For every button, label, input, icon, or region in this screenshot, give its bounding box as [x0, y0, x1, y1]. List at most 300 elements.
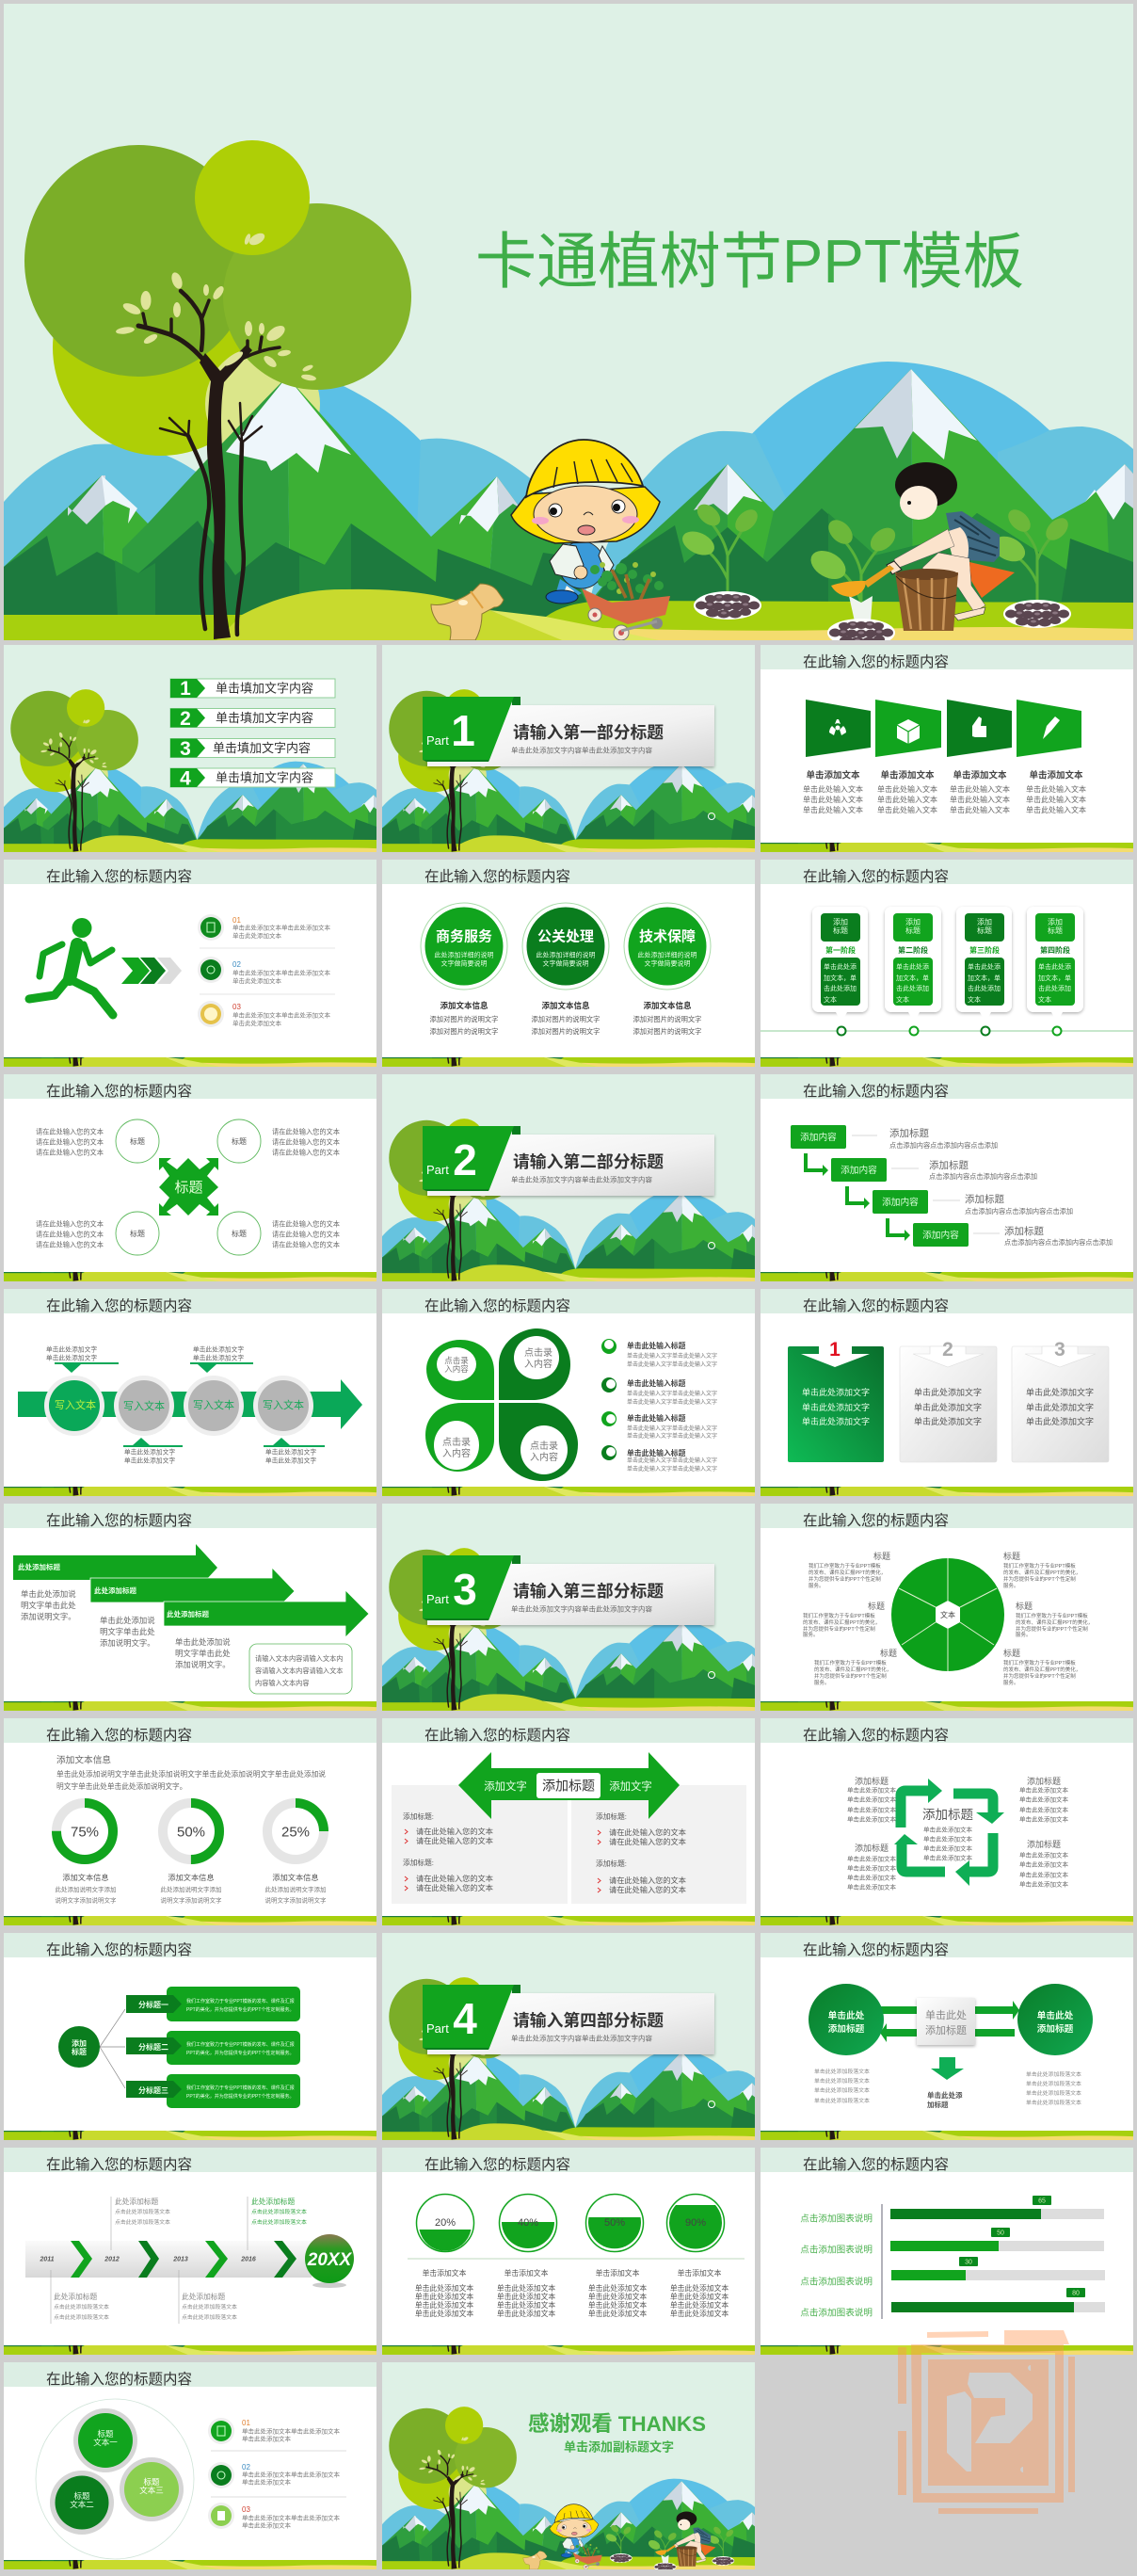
column 1 text: 单击添加文本	[806, 770, 860, 781]
side text: 请在此处输入您的文本	[272, 1241, 340, 1248]
step text: 添加标题	[1004, 1225, 1044, 1237]
outline circle	[36, 2399, 194, 2559]
years: 2012	[104, 2256, 120, 2263]
heading: 在此输入您的标题内容	[424, 2156, 570, 2173]
top right list	[1019, 1776, 1069, 1823]
years	[39, 2256, 256, 2263]
side text: 请在此处输入您的文本	[36, 1241, 104, 1248]
note box	[249, 1644, 352, 1694]
contents item 1	[170, 678, 335, 700]
top left list	[847, 1776, 896, 1823]
branch 1	[126, 1987, 300, 2021]
node labels: 写入文本	[263, 1398, 304, 1411]
step box labels: 添加内容	[800, 1131, 837, 1143]
step text: 点击添加内容点击添加内容点击添加	[1004, 1238, 1113, 1247]
stage card 3: 第三阶段	[969, 945, 1000, 955]
gauge text 4	[670, 2268, 729, 2318]
arrow: down	[931, 2057, 964, 2080]
four-leaf shape: 入内容	[524, 1358, 552, 1370]
gauge text 1	[415, 2268, 473, 2318]
left panel text: 请在此处输入您的文本	[416, 1883, 493, 1892]
side text: 请在此处输入您的文本	[36, 1230, 104, 1239]
double arrow: 添加标题	[542, 1778, 595, 1793]
donut captions	[55, 1873, 327, 1904]
bottom left block: 服务。	[814, 1679, 830, 1686]
top right block: 的发布、课件及汇报PPT的美化，	[1003, 1569, 1081, 1576]
card 2	[900, 1339, 997, 1462]
service captions: 添加对图片的说明文字	[532, 1027, 600, 1036]
scene: tree, mountains and children	[4, 4, 1133, 647]
heading: 在此输入您的标题内容	[424, 1297, 570, 1314]
column 2 text: 单击此处输入文本	[877, 795, 937, 804]
side text	[36, 1128, 340, 1248]
side text: 请在此处输入您的文本	[272, 1220, 340, 1228]
stage card 2: 文本	[896, 995, 909, 1004]
stage card 3: 文本	[968, 995, 981, 1004]
list text: 单击此处输入标题	[627, 1448, 686, 1457]
branch 2	[126, 2031, 300, 2065]
arrow 1	[13, 1544, 217, 1580]
service captions: 添加对图片的说明文字	[532, 1015, 600, 1023]
four-leaf shape: 入内容	[444, 1364, 469, 1374]
arrow 3: 此处添加标题	[167, 1609, 209, 1618]
contents item 2: 单击填加文字内容	[216, 711, 313, 725]
item 01: 单击此处添加文本	[232, 931, 282, 940]
panel: running man slide	[4, 860, 376, 1067]
bar labels	[800, 2213, 873, 2318]
circle labels: 标题	[130, 1229, 145, 1238]
bottom left list	[847, 1843, 896, 1891]
side text: 请在此处输入您的文本	[272, 1149, 340, 1156]
panel: cascading arrows slide	[4, 1504, 376, 1711]
list text: 单击此处输入文字单击此处输入文字	[627, 1390, 717, 1397]
bottom left list: 单击此处添加文本	[847, 1883, 896, 1891]
double arrow: 添加文字	[484, 1779, 527, 1793]
card 2: 单击此处添加文字	[914, 1402, 982, 1412]
note box: 容请输入文本内容请输入文本	[255, 1666, 343, 1675]
four-leaf shape: 入内容	[530, 1451, 558, 1463]
column 3 text: 单击此处输入文本	[950, 795, 1010, 804]
item 02: 02	[242, 2463, 250, 2471]
cover slide	[4, 4, 1133, 647]
intro text: 单击此处添加说明文字单击此处添加说明文字单击此处添加说明文字单击此处添加说	[56, 1769, 326, 1779]
card 1: 1	[829, 1339, 841, 1360]
bottom right list: 单击此处添加文本	[1019, 1870, 1069, 1879]
four-leaf shape	[425, 1328, 578, 1481]
right panel text: 添加标题:	[596, 1811, 627, 1821]
list text: 单击此处输入文字单击此处输入文字	[627, 1352, 717, 1360]
intro text: 添加文本信息	[56, 1753, 111, 1766]
four-leaf shape: 点击录	[442, 1437, 471, 1448]
timeline band	[25, 2241, 312, 2278]
card 2: 单击此处添加文字	[914, 1416, 982, 1426]
bottom right block: 标题	[1003, 1648, 1020, 1658]
panel: four-leaf slide	[382, 1289, 755, 1496]
milestone above 1: 点击此处添加段落文本	[115, 2208, 170, 2215]
stage card 2: 标题	[905, 926, 921, 935]
donut captions: 此处添加说明文字添加	[160, 1885, 222, 1893]
stage card 1: 单击此处添	[824, 962, 857, 971]
watermark stamp	[898, 2330, 1075, 2514]
centre box: 单击此处	[925, 2009, 967, 2021]
step text: 添加标题	[889, 1127, 929, 1139]
circle labels	[130, 1136, 247, 1238]
cycle centre text	[922, 1808, 973, 1862]
step text: 添加标题	[929, 1159, 969, 1171]
pennant shapes with icons	[806, 700, 1081, 757]
bubble 1: 标题	[97, 2429, 114, 2439]
panel: four stages slide	[761, 860, 1133, 1067]
gauge 40 percent	[499, 2194, 557, 2252]
stage card 3	[956, 907, 1012, 1036]
card 1: 单击此处添加文字	[802, 1387, 870, 1397]
bar labels: 点击添加图表说明	[800, 2213, 873, 2224]
stage card 1: 文本	[824, 995, 837, 1004]
heading: 在此输入您的标题内容	[803, 653, 949, 670]
stage card 4	[1027, 907, 1083, 1036]
heading: 在此输入您的标题内容	[424, 868, 570, 885]
left text: 单击此处添加段落文本	[814, 2097, 870, 2104]
top left list: 单击此处添加文本	[847, 1806, 896, 1813]
top left block: 的发布、课件及汇报PPT的美化，	[809, 1569, 886, 1576]
stage card 2: 击此处添加	[896, 984, 929, 992]
panel: four pennant icons slide	[761, 645, 1133, 852]
stage card 3: 单击此处添	[968, 962, 1001, 971]
left panel text: 请在此处输入您的文本	[416, 1827, 493, 1836]
bottom right block: 并为您提供专业的PPT个性定制	[1003, 1672, 1076, 1680]
arrow text 1: 单击此处添加说	[21, 1589, 76, 1599]
donut 75 percent	[56, 1803, 113, 1860]
panel: part 3 section slide	[382, 1504, 755, 1711]
part 4 labels: Part	[426, 2021, 449, 2036]
middle right block: 的发布、课件及汇报PPT的美化，	[1016, 1618, 1093, 1626]
item 02	[198, 957, 331, 985]
right text: 单击此处添加段落文本	[1026, 2070, 1081, 2078]
item 02: 单击此处添加文本	[242, 2478, 292, 2486]
gauge 20 percent: 20%	[435, 2217, 456, 2229]
item 03: 03	[242, 2505, 250, 2514]
branch 2: 我们工作室致力于专业PPT模板的发布、课件及汇报	[186, 2041, 295, 2048]
column 2 text: 单击添加文本	[880, 770, 935, 781]
bar labels: 点击添加图表说明	[800, 2245, 873, 2256]
service circle 3: 此处添加详细的说明	[638, 951, 697, 958]
service circle 1: 此处添加详细的说明	[435, 951, 493, 958]
list bullets	[601, 1339, 617, 1460]
circle labels: 标题	[130, 1136, 145, 1146]
right panel text: 请在此处输入您的文本	[609, 1837, 686, 1846]
list text: 单击此处输入标题	[627, 1413, 686, 1423]
gauge text 3: 单击添加文本	[596, 2268, 640, 2278]
bottom left list: 添加标题	[855, 1843, 889, 1853]
list text: 单击此处输入文字单击此处输入文字	[627, 1425, 717, 1432]
milestone above 1	[115, 2197, 170, 2226]
part 4 labels	[426, 1994, 477, 2043]
right text: 单击此处添加段落文本	[1026, 2099, 1081, 2106]
step box labels: 添加内容	[841, 1164, 877, 1176]
stage card 1: 标题	[833, 926, 848, 935]
column 1 text: 单击此处输入文本	[803, 795, 863, 804]
step connectors	[852, 1135, 1000, 1233]
panel: part 4 section slide	[382, 1933, 755, 2140]
stage card 4: 加文本，单	[1038, 974, 1071, 982]
bubble 3: 标题	[143, 2477, 160, 2487]
bottom left block: 的发布、课件及汇报PPT的美化，	[814, 1666, 891, 1673]
top right block: 并为您提供专业的PPT个性定制	[1003, 1575, 1076, 1583]
top left list: 单击此处添加文本	[847, 1785, 896, 1795]
milestone lines	[51, 2197, 248, 2324]
step box labels	[800, 1131, 959, 1241]
icon: running man	[29, 918, 113, 1015]
list text: 单击此处输入文字单击此处输入文字	[627, 1457, 717, 1464]
card 3: 单击此处添加文字	[1026, 1416, 1094, 1426]
cycle centre text: 单击此处添加文本	[923, 1834, 973, 1843]
bottom right list: 单击此处添加文本	[1019, 1851, 1069, 1859]
part 2 heading	[511, 1151, 664, 1184]
bubble 2: 文本二	[70, 2500, 94, 2509]
panel: part 2 section slide	[382, 1074, 755, 1281]
step boxes	[791, 1125, 969, 1247]
top left list: 单击此处添加文本	[847, 1795, 896, 1804]
bar chart: 65	[1038, 2198, 1046, 2205]
top left block: 我们工作室致力于专业PPT模板	[809, 1562, 881, 1570]
panel: thanks slide	[382, 2362, 755, 2571]
service captions: 添加对图片的说明文字	[633, 1015, 701, 1023]
stage card 4: 第四阶段	[1040, 945, 1070, 955]
bubble 2: 标题	[73, 2491, 90, 2501]
side text: 请在此处输入您的文本	[36, 1220, 104, 1228]
panel: double arrow comparison slide	[382, 1718, 755, 1925]
milestone below 2: 此处添加标题	[182, 2292, 225, 2301]
root node: 标题	[72, 2047, 87, 2056]
right panel text: 请在此处输入您的文本	[609, 1827, 686, 1837]
right circle: 添加标题	[1037, 2022, 1074, 2035]
part 3 heading: 请输入第三部分标题	[513, 1581, 664, 1601]
arrow: chevrons	[121, 958, 182, 984]
list text: 单击此处输入标题	[627, 1341, 686, 1350]
middle left block: 我们工作室致力于专业PPT模板	[803, 1612, 875, 1619]
part 3 heading: 单击此处添加文字内容单击此处添加文字内容	[511, 1604, 652, 1614]
panel: horizontal bar chart slide	[761, 2148, 1133, 2355]
middle left block	[803, 1601, 885, 1638]
top left list: 添加标题	[855, 1776, 889, 1786]
step text	[889, 1127, 1113, 1247]
panel: part 1 section slide	[382, 645, 755, 852]
panel: branching subtopics slide	[4, 1933, 376, 2140]
column 3 text: 单击此处输入文本	[950, 805, 1010, 814]
bubble 2	[50, 2471, 114, 2535]
branch 3: 分标题三	[138, 2085, 168, 2095]
bottom left block	[814, 1648, 897, 1686]
arrow text 3: 单击此处添加说	[175, 1637, 231, 1647]
root node	[58, 2026, 100, 2068]
arrow text 1: 添加说明文字。	[21, 1612, 76, 1621]
contents item 1: 单击填加文字内容	[216, 682, 313, 695]
left circle	[809, 1984, 884, 2055]
donut captions: 说明文字添加说明文字	[55, 1896, 117, 1904]
contents item 3: 3	[180, 738, 191, 760]
intro text: 明文字单击此处单击此处添加说明文字。	[56, 1781, 186, 1791]
bottom left block: 标题	[880, 1648, 897, 1658]
item 01: 单击此处添加文本单击此处添加文本	[242, 2427, 341, 2435]
card 2: 单击此处添加文字	[914, 1387, 982, 1397]
list text	[627, 1341, 717, 1473]
right text	[1026, 2070, 1081, 2106]
heading: 在此输入您的标题内容	[46, 1297, 192, 1314]
heading: 在此输入您的标题内容	[803, 2156, 949, 2173]
branch 1: PPT的美化，并为您提供专业的PPT个性定制服务。	[186, 2006, 294, 2013]
column 4 text: 单击此处输入文本	[1026, 784, 1086, 794]
middle left block: 的发布、课件及汇报PPT的美化，	[803, 1618, 880, 1626]
column 4 text: 单击添加文本	[1029, 770, 1083, 781]
stage card 3: 标题	[977, 926, 992, 935]
four-leaf shape: 点击录	[530, 1441, 558, 1452]
gauge text 4: 单击添加文本	[678, 2268, 722, 2278]
note box: 内容输入文本内容	[255, 1679, 310, 1687]
contents item 2	[170, 708, 335, 730]
part 1 labels	[426, 706, 475, 755]
milestone above 2: 点击此处添加段落文本	[251, 2218, 307, 2226]
donut 50 percent	[163, 1803, 219, 1860]
elbow arrows	[806, 1153, 905, 1235]
bottom left block: 并为您提供专业的PPT个性定制	[814, 1672, 887, 1680]
node labels: 写入文本	[193, 1398, 234, 1411]
left circle: 添加标题	[828, 2022, 865, 2035]
service circle 2: 公关处理	[537, 928, 594, 945]
thanks subtitle: 单击添加副标题文字	[564, 2440, 674, 2454]
stage card 1: 添加	[833, 917, 848, 926]
top right block	[1003, 1551, 1081, 1589]
exchange arrows	[878, 2001, 1019, 2042]
gauge text 2	[497, 2268, 555, 2318]
column 2 text	[877, 770, 937, 814]
bar chart: 50	[997, 2230, 1004, 2237]
bubble 3	[120, 2457, 184, 2521]
donut 50 percent: 50%	[177, 1825, 205, 1840]
branch 1: 分标题一	[138, 2000, 168, 2009]
contents item 3: 单击填加文字内容	[213, 741, 311, 755]
column 1 text: 单击此处输入文本	[803, 805, 863, 814]
service circle 1	[421, 903, 507, 990]
bubble 1	[73, 2408, 137, 2472]
gauge text 2: 单击添加文本	[504, 2268, 549, 2278]
item 03	[198, 1001, 331, 1027]
bottom right block	[1003, 1648, 1081, 1686]
heading: 在此输入您的标题内容	[46, 1727, 192, 1744]
heading: 在此输入您的标题内容	[46, 1512, 192, 1529]
gauge text 2: 单击此处添加文本	[497, 2309, 555, 2318]
gauge text 1: 单击此处添加文本	[415, 2309, 473, 2318]
step text: 点击添加内容点击添加内容点击添加	[889, 1141, 998, 1150]
bar chart: 80	[1072, 2290, 1080, 2297]
bottom right list	[1019, 1839, 1069, 1889]
middle right block: 服务。	[1016, 1631, 1032, 1638]
left panel text: 添加标题:	[403, 1858, 434, 1867]
gauge text 1: 单击添加文本	[423, 2268, 467, 2278]
gauge text 2: 单击此处添加文本	[497, 2300, 555, 2310]
years: 2016	[240, 2256, 256, 2263]
heading: 在此输入您的标题内容	[46, 2371, 192, 2388]
top right list: 单击此处添加文本	[1019, 1806, 1069, 1813]
stage card 3: 添加	[977, 917, 992, 926]
column 3 text: 单击此处输入文本	[950, 784, 1010, 794]
service circle 3: 文字做简要说明	[644, 958, 691, 968]
branch 3	[126, 2074, 300, 2108]
service captions: 添加文本信息	[643, 1001, 692, 1010]
service captions: 添加对图片的说明文字	[430, 1027, 498, 1036]
list text: 单击此处输入标题	[627, 1378, 686, 1388]
heading: 在此输入您的标题内容	[803, 1941, 949, 1958]
item 01: 01	[232, 916, 241, 925]
service circle 2: 文字做简要说明	[542, 958, 589, 968]
stage card 1: 击此处添加	[824, 984, 857, 992]
item 03: 单击此处添加文本单击此处添加文本	[232, 1011, 331, 1019]
item 01	[198, 914, 331, 941]
milestone above 2: 点击此处添加段落文本	[251, 2208, 307, 2215]
arrow text 1: 明文字单击此处	[21, 1601, 76, 1610]
middle left block: 并为您提供专业的PPT个性定制	[803, 1625, 875, 1633]
list text: 单击此处输入文字单击此处输入文字	[627, 1465, 717, 1473]
heading: 在此输入您的标题内容	[424, 1727, 570, 1744]
node labels: 写入文本	[55, 1398, 96, 1411]
item 03: 单击此处添加文本单击此处添加文本	[242, 2514, 341, 2521]
milestone below 2	[182, 2292, 237, 2321]
top right block: 我们工作室致力于专业PPT模板	[1003, 1562, 1076, 1570]
item 02: 单击此处添加文本单击此处添加文本	[232, 968, 331, 977]
donut captions: 此处添加说明文字添加	[55, 1885, 117, 1893]
item 03	[208, 2503, 341, 2529]
heading: 在此输入您的标题内容	[803, 868, 949, 885]
stage card 2: 第二阶段	[898, 945, 928, 955]
centre cross shape	[159, 1158, 218, 1216]
gauge 90 percent	[666, 2194, 725, 2252]
item 02	[208, 2462, 341, 2488]
milestone below 1: 此处添加标题	[54, 2292, 97, 2301]
service captions	[430, 1001, 701, 1036]
callout text: 单击此处添加文字	[124, 1448, 175, 1456]
cover title: 卡通植树节PPT模板	[475, 227, 1024, 296]
top right list: 单击此处添加文本	[1019, 1785, 1069, 1795]
part 2 heading: 单击此处添加文字内容单击此处添加文字内容	[511, 1175, 652, 1184]
panel: wheel diagram slide	[761, 1504, 1133, 1711]
stage card 4: 添加	[1048, 917, 1063, 926]
gauge text 1: 单击此处添加文本	[415, 2292, 473, 2301]
card 1	[788, 1339, 884, 1462]
years: 2011	[39, 2256, 55, 2263]
side text: 请在此处输入您的文本	[36, 1149, 104, 1156]
cycle centre text: 单击此处添加文本	[923, 1843, 973, 1853]
item 03: 单击此处添加文本	[232, 1019, 282, 1027]
card 2: 2	[942, 1339, 953, 1360]
milestone below 1: 点击此处添加段落文本	[54, 2313, 109, 2321]
gauge 40 percent: 40%	[518, 2217, 538, 2229]
bar chart	[882, 2196, 1105, 2319]
stage card 2: 单击此处添	[896, 962, 929, 971]
bottom right list: 单击此处添加文本	[1019, 1879, 1069, 1889]
step box labels: 添加内容	[882, 1196, 919, 1208]
note box: 请输入文本内容请输入文本内	[255, 1654, 343, 1663]
double arrow	[458, 1752, 680, 1819]
panel: two-way exchange slide	[761, 1933, 1133, 2140]
side text: 请在此处输入您的文本	[36, 1128, 104, 1135]
left text: 单击此处添加段落文本	[814, 2086, 870, 2094]
column 4 text: 单击此处输入文本	[1026, 795, 1086, 804]
left panel text: 请在此处输入您的文本	[416, 1874, 493, 1883]
20XX ball	[305, 2234, 354, 2288]
arrow text 3: 添加说明文字。	[175, 1660, 231, 1669]
heading: 在此输入您的标题内容	[46, 2156, 192, 2173]
card 3: 单击此处添加文字	[1026, 1387, 1094, 1397]
centre cross shape: 标题	[174, 1180, 203, 1196]
